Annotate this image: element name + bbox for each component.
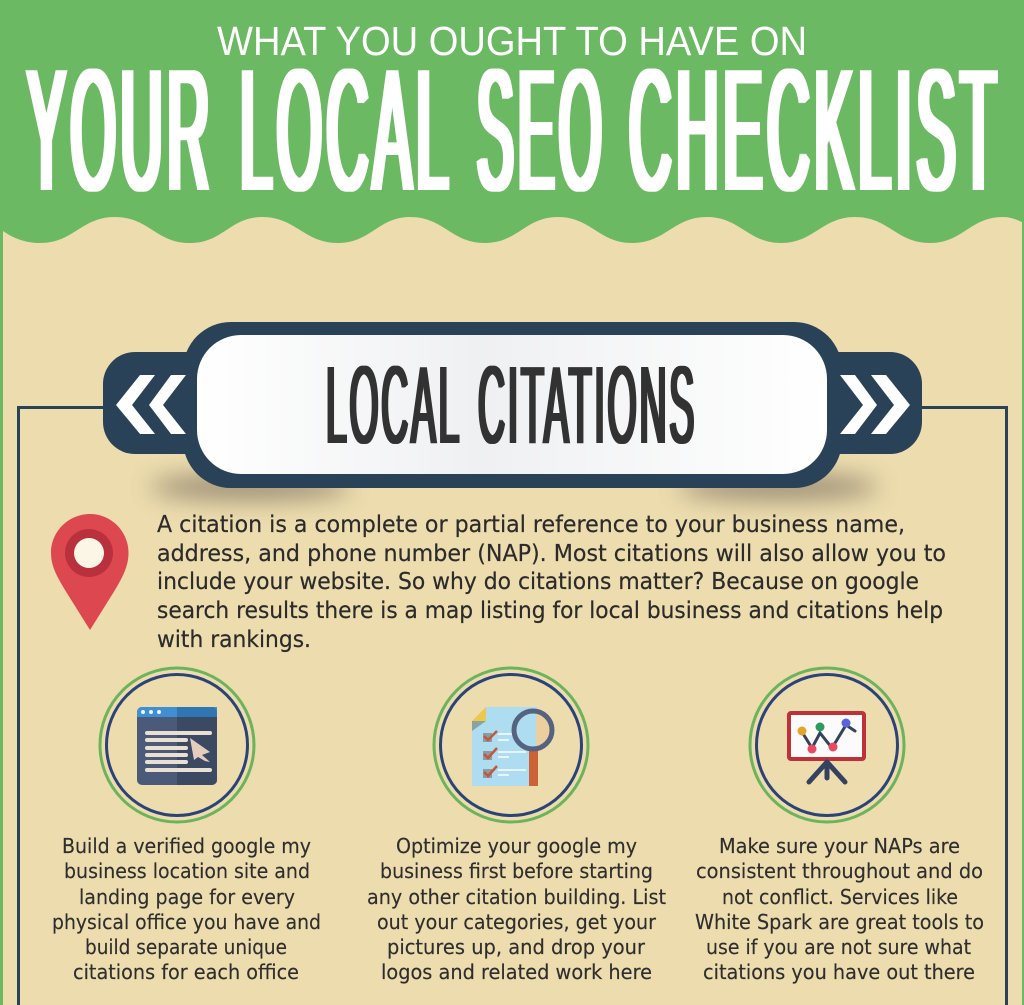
caption: column 1: build separate unique	[85, 935, 287, 959]
intro paragraph: A citation is a complete or partial reference to your business name,	[157, 512, 905, 538]
section frame	[18, 408, 1006, 1005]
icon: presentation chart in circle	[750, 668, 904, 822]
icon: right chevrons	[840, 375, 910, 434]
banner heading: LOCAL	[326, 344, 462, 467]
caption: column 2: out your categories, get your	[377, 910, 657, 934]
icon: left chevrons	[116, 375, 186, 434]
caption: column 2: Optimize your google my	[396, 834, 637, 858]
icon: browser window in circle	[100, 668, 254, 822]
intro paragraph: with rankings.	[157, 627, 311, 653]
caption: column 3: citations you have out there	[703, 960, 975, 984]
banner outer pill	[183, 322, 842, 488]
caption: column 2	[367, 834, 666, 984]
title: LOCAL	[240, 32, 453, 227]
header: green wavy banner	[0, 0, 1024, 243]
intro paragraph: include your website. So why do citations matter? Because on google	[157, 569, 919, 595]
caption: column 2: logos and related work here	[381, 960, 652, 984]
caption: column 3: Make sure your NAPs are	[719, 834, 960, 858]
caption: column 1: citations for each office	[73, 960, 299, 984]
caption: column 1: landing page for every	[79, 885, 295, 909]
banner side tabs	[103, 352, 922, 454]
intro paragraph: address, and phone number (NAP). Most citations will also allow you to	[157, 541, 946, 567]
title	[27, 32, 1001, 227]
intro paragraph: search results there is a map listing for local business and citations help	[157, 598, 943, 624]
caption: column 2: pictures up, and drop your	[387, 935, 646, 959]
caption: column 3: consistent throughout and do	[696, 859, 983, 883]
caption: column 1	[52, 834, 321, 984]
banner inner pill	[197, 335, 827, 474]
title: SEO	[477, 32, 606, 227]
banner: local citations	[103, 322, 922, 500]
caption: column 2: business first before starting	[380, 859, 653, 883]
caption: column 2: any other citation building. List	[367, 885, 666, 909]
title: YOUR	[27, 32, 214, 227]
caption: column 3: White Spark are great tools to	[695, 910, 984, 934]
icon: map pin	[51, 514, 128, 630]
caption: column 3	[695, 834, 984, 984]
icon: checklist and magnifier in circle	[434, 668, 588, 822]
caption: column 1: physical office you have and	[52, 910, 321, 934]
banner shadow	[150, 474, 878, 500]
caption: column 1: business location site and	[64, 859, 310, 883]
caption: column 3: use if you are not sure what	[706, 935, 971, 959]
intro paragraph	[157, 512, 946, 653]
caption: column 3: not conflict. Services like	[722, 885, 958, 909]
caption: column 1: Build a verified google my	[62, 834, 311, 858]
subtitle: WHAT YOU OUGHT TO HAVE ON	[217, 18, 807, 64]
